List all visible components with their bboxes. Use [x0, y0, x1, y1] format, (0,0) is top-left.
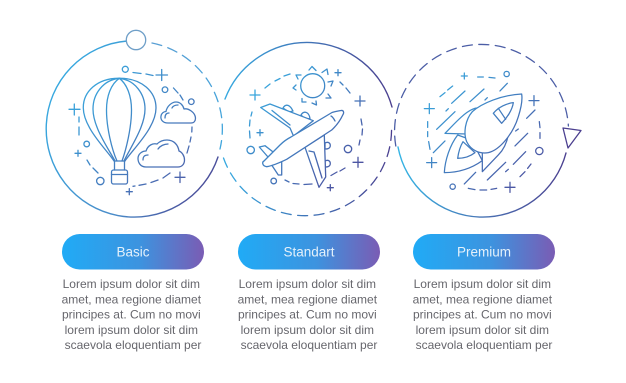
label pill: Basic: Basic: [116, 244, 150, 260]
arrow head: [563, 128, 581, 148]
text block: Premium: Lorem ipsum dolor sit dim: [414, 277, 551, 291]
text block: Standart: Lorem ipsum dolor sit dim: [239, 277, 376, 291]
inner dashed path: [79, 72, 192, 186]
solid ring arc: [225, 42, 392, 107]
ring node: [126, 30, 146, 50]
text block: Basic: amet, mea regione diamet: [62, 292, 202, 306]
solid ring arc: [46, 41, 218, 217]
text block: Standart: lorem ipsum dolor sit dim: [241, 323, 374, 337]
icon: hot air balloon: [83, 78, 156, 184]
decorative dots and plus marks: [69, 66, 194, 195]
label pill: Standart: Standart: [283, 244, 335, 260]
dashed ring arc: [152, 43, 222, 149]
text block: Premium: scaevola eloquentiam per: [416, 338, 552, 352]
text block: Standart: scaevola eloquentiam per: [241, 338, 377, 352]
text block: Premium: principes at. Cum no movi: [413, 308, 552, 322]
label pill: Premium: [413, 234, 555, 270]
icon: upper cloud: [161, 102, 196, 123]
text block: Standart: amet, mea regione diamet: [238, 292, 378, 306]
text block: Premium: lorem ipsum dolor sit dim: [416, 323, 549, 337]
speed lines and inner dashes: [428, 77, 540, 190]
decorative dots and plus marks: [247, 70, 365, 191]
decorative dots and plus marks: [424, 71, 543, 192]
text block: Premium: amet, mea regione diamet: [413, 292, 553, 306]
panel: premium circle: [395, 44, 581, 217]
panel: standard circle: [224, 42, 392, 216]
text block: Basic: principes at. Cum no movi: [62, 308, 201, 322]
dashed ring arc: [224, 124, 392, 216]
solid ring arc: [398, 147, 566, 217]
panel: basic circle: [46, 30, 222, 217]
inner dashed path: [250, 74, 362, 184]
icon: sun: [293, 66, 333, 105]
dashed ring arc: [395, 44, 568, 146]
text block: Basic: scaevola eloquentiam per: [65, 338, 201, 352]
label pill: Standart: [238, 234, 380, 270]
text block: Standart: principes at. Cum no movi: [238, 308, 377, 322]
text block: Basic: Lorem ipsum dolor sit dim: [63, 277, 200, 291]
label pill: Premium: Premium: [457, 244, 511, 260]
text block: Basic: lorem ipsum dolor sit dim: [65, 323, 198, 337]
icon: rocket: [444, 94, 522, 173]
label pill: Basic: [62, 234, 204, 270]
icon: airplane: [259, 104, 344, 187]
icon: lower cloud: [138, 140, 184, 167]
